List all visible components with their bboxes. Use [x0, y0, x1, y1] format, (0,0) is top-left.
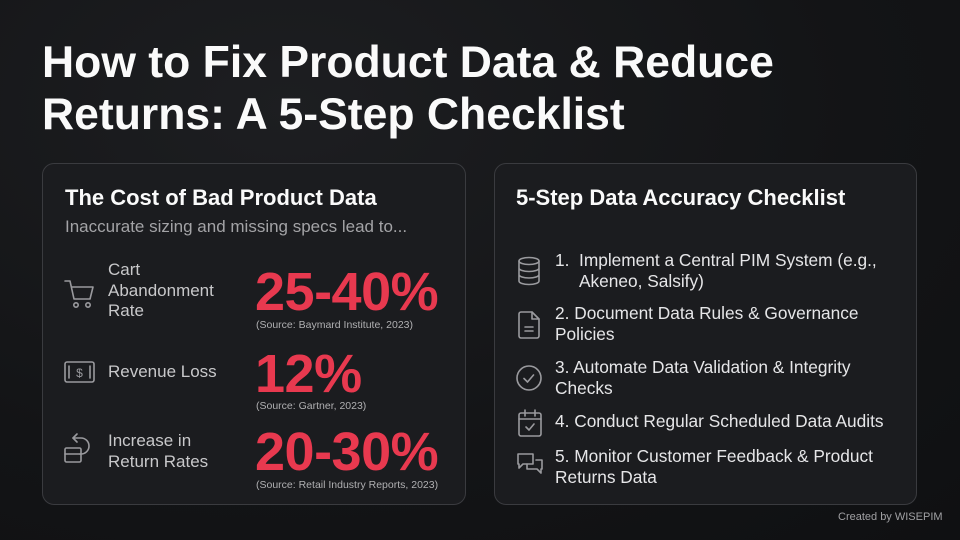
- footer credit: Created by WISEPIM: [838, 511, 943, 523]
- heading: 5-Step Data Accuracy Checklist: [516, 185, 845, 210]
- source: (Source: Retail Industry Reports, 2023): [256, 479, 438, 491]
- source: (Source: Gartner, 2023): [256, 400, 366, 412]
- label: return rates: Return Rates: [108, 452, 208, 470]
- item 2: 2. Document Data Rules & Governance: [555, 303, 859, 323]
- item 3: 3. Automate Data Validation & Integrity: [555, 357, 851, 377]
- title: [42, 38, 774, 139]
- label: cart abandonment: Rate: [108, 301, 144, 320]
- icon: return box: [64, 433, 90, 463]
- icon: money: $: [76, 366, 83, 380]
- icon: check circle: [516, 365, 542, 391]
- label: revenue loss: Revenue Loss: [108, 362, 217, 381]
- icon: database: [518, 256, 540, 286]
- title: Returns: A 5-Step Checklist: [42, 90, 625, 139]
- item 2: [555, 303, 859, 344]
- stat: 20-30%: 20-30%: [255, 422, 438, 482]
- label: return rates: Increase in: [108, 431, 191, 450]
- label: return rates: [108, 431, 208, 470]
- panel: checklist: [494, 163, 917, 505]
- item 1: 1. Implement a Central PIM System (e.g.,: [555, 250, 877, 270]
- source: (Source: Baymard Institute, 2023): [256, 319, 413, 331]
- item 4: 4. Conduct Regular Scheduled Data Audits: [555, 411, 884, 431]
- title: How to Fix Product Data & Reduce: [42, 38, 774, 87]
- icon: cart: [64, 280, 94, 308]
- item 5: Returns Data: [555, 466, 657, 486]
- label: cart abandonment: [108, 260, 214, 320]
- icon: chat: [517, 453, 543, 474]
- item 3: [555, 357, 851, 398]
- item 3: Checks: [555, 378, 613, 398]
- item 2: Policies: [555, 324, 615, 344]
- stat: 25-40%: 25-40%: [255, 262, 438, 322]
- icon: money: [64, 361, 95, 383]
- item 5: 5. Monitor Customer Feedback & Product: [555, 446, 873, 466]
- item 1: [555, 250, 877, 290]
- stat: 12%: 12%: [255, 344, 362, 404]
- panel: cost of bad product data: [42, 163, 466, 505]
- icon: document: [518, 311, 540, 339]
- icon: calendar: [518, 409, 542, 437]
- label: cart abandonment: Cart: [108, 260, 140, 279]
- item 5: [555, 446, 873, 486]
- label: cart abandonment: Abandonment: [108, 280, 214, 300]
- heading: The Cost of Bad Product Data: [65, 185, 377, 210]
- item 1: Akeneo, Salsify): [579, 270, 704, 290]
- subtitle: Inaccurate sizing and missing specs lead to...: [65, 217, 407, 236]
